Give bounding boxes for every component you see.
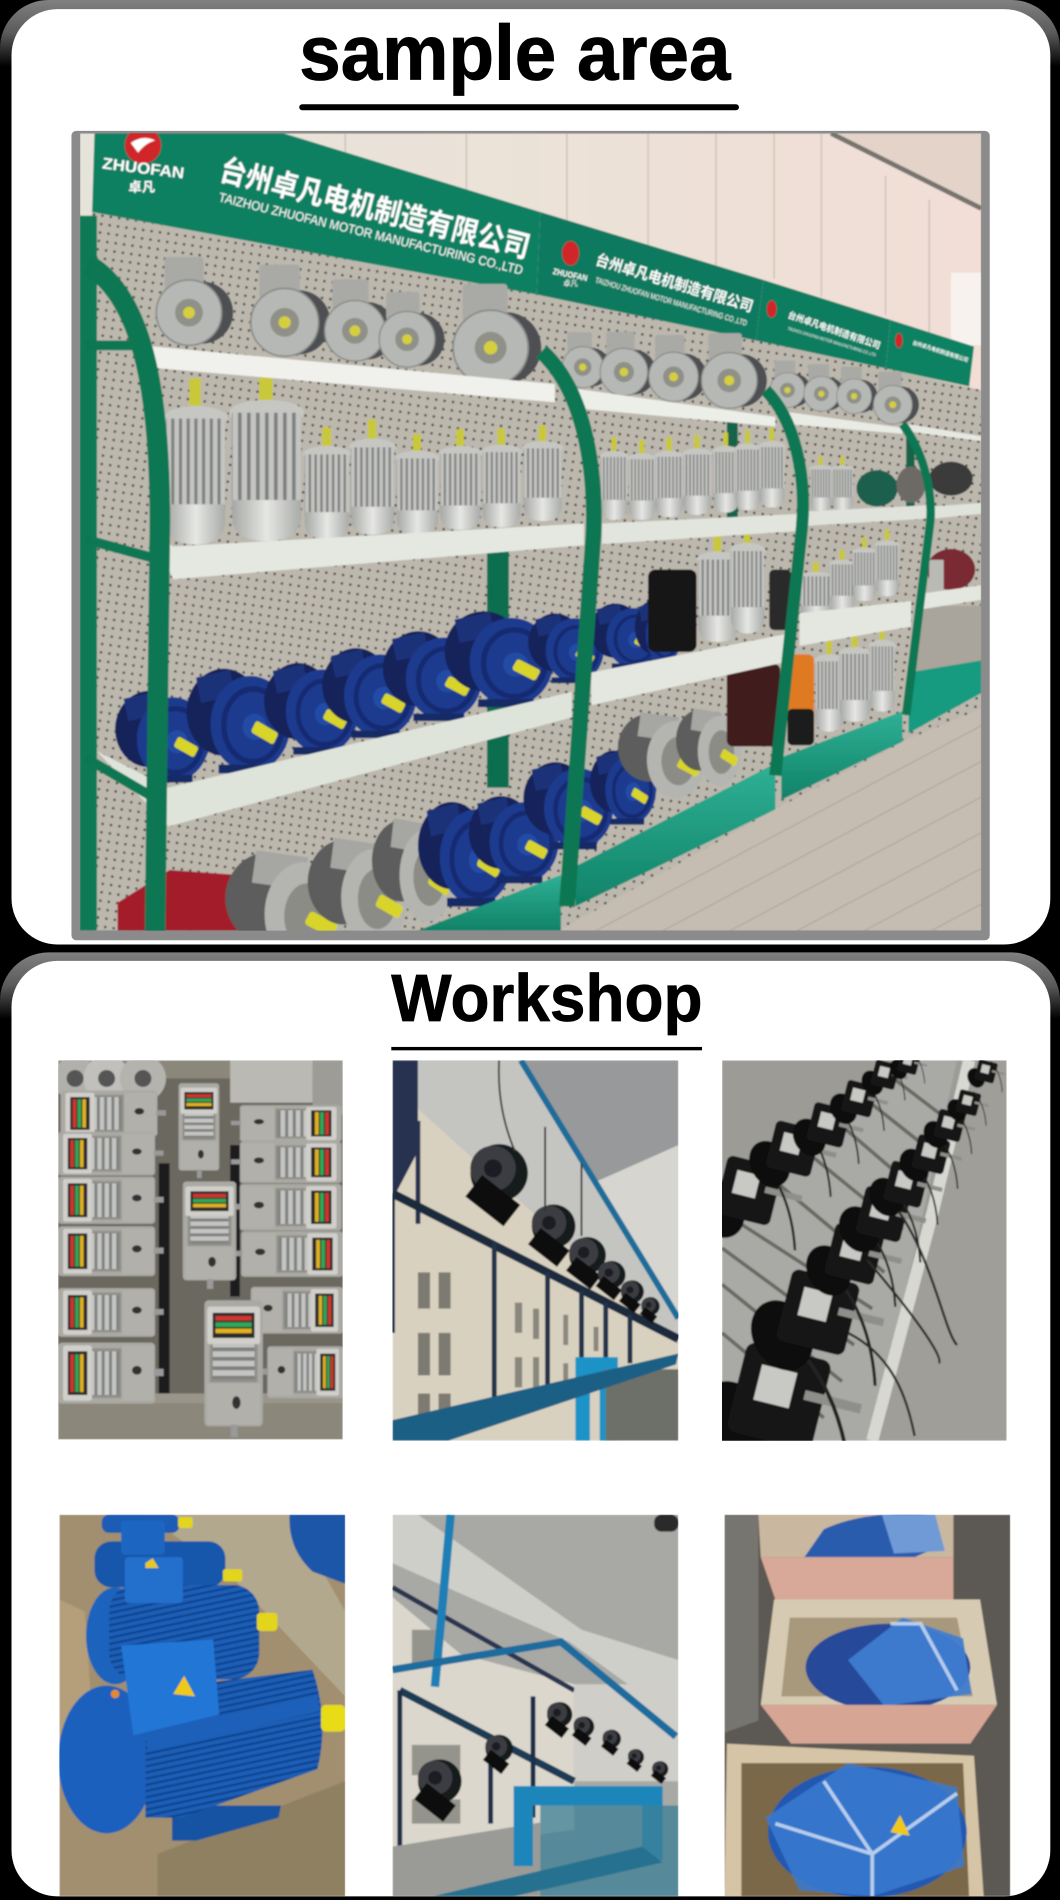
signs: TAIZHOU ZHUOFAN MOTOR MANUFACTURING CO.,LTD xyxy=(217,189,525,278)
motors: second shelf xyxy=(164,372,973,545)
photo: silver motors on pallet xyxy=(53,1055,343,1440)
panel: workshop xyxy=(0,952,1060,1900)
signs: 台州卓凡电机制造有限公司 xyxy=(787,309,882,351)
signs: 台州卓凡电机制造有限公司 xyxy=(216,152,534,265)
signs: ZHUOFAN xyxy=(101,156,185,182)
signs: 卓凡 xyxy=(563,279,578,288)
photo: blue motors on floor xyxy=(58,1515,345,1896)
motors: bottom shelf xyxy=(116,630,896,931)
photo: black motors on metal racks xyxy=(722,1060,1007,1441)
signs xyxy=(92,127,974,387)
signs: TAIZHOU ZHUOFAN MOTOR MANUFACTURING CO.,LTD xyxy=(594,276,748,328)
teal bases xyxy=(418,660,981,931)
photo: motor display shelves xyxy=(80,127,981,967)
green uprights xyxy=(85,264,931,933)
signs: TAIZHOU ZHUOFAN MOTOR MANUFACTURING CO.,LTD xyxy=(787,326,877,357)
motors: third shelf, blue xyxy=(115,525,975,783)
signs: 台州卓凡电机制造有限公司 xyxy=(594,251,755,316)
photo: crated motors xyxy=(724,1514,1010,1898)
signs: ZHUOFAN xyxy=(552,266,588,283)
heading: sample area: sample area xyxy=(299,10,731,96)
shelves xyxy=(97,345,981,826)
photo: overhead rail with hanging motors xyxy=(393,1515,678,1896)
signs: 台州卓凡电机制造有限公司 xyxy=(912,338,969,364)
photo: overhead conveyor at window xyxy=(393,1060,678,1441)
motors: top shelf xyxy=(156,257,919,424)
signs: 卓凡 xyxy=(128,178,155,194)
panel: sample area xyxy=(0,0,1060,967)
heading: Workshop: Workshop xyxy=(391,962,703,1036)
photo frame xyxy=(71,131,990,940)
